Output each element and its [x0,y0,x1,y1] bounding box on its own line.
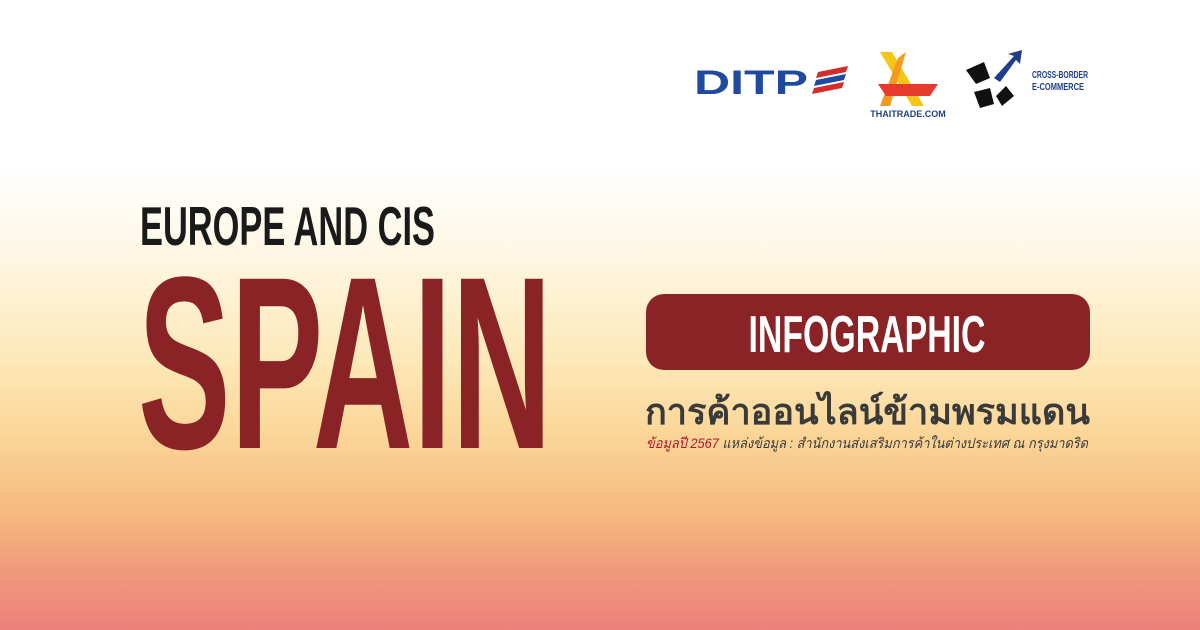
logo: ThaiTrade [870,52,946,119]
source line: ข้อมูลปี 2567 แหล่งข้อมูล : สำนักงานส่งเสริมการค้าในต่างประเทศ ณ กรุงมาดริด [646,435,1089,452]
logo: DITP: DITP [694,64,808,102]
logo: ThaiTrade: THAITRADE.COM [870,109,946,119]
pill: infographic: INFOGRAPHIC [748,306,986,364]
title: Spain: SPAIN [138,226,552,501]
logo: DITP [694,64,848,102]
logo: Cross-border e-commerce: E-COMMERCE [1032,82,1084,93]
heading: Europe and CIS: EUROPE AND CIS [140,195,435,257]
pill: infographic [646,294,1090,370]
logo: Cross-border e-commerce: CROSS-BORDER [1032,70,1089,81]
thai title: การค้าออนไลน์ข้ามพรมแดน [645,390,1090,432]
logo: Cross-border e-commerce [966,50,1089,108]
